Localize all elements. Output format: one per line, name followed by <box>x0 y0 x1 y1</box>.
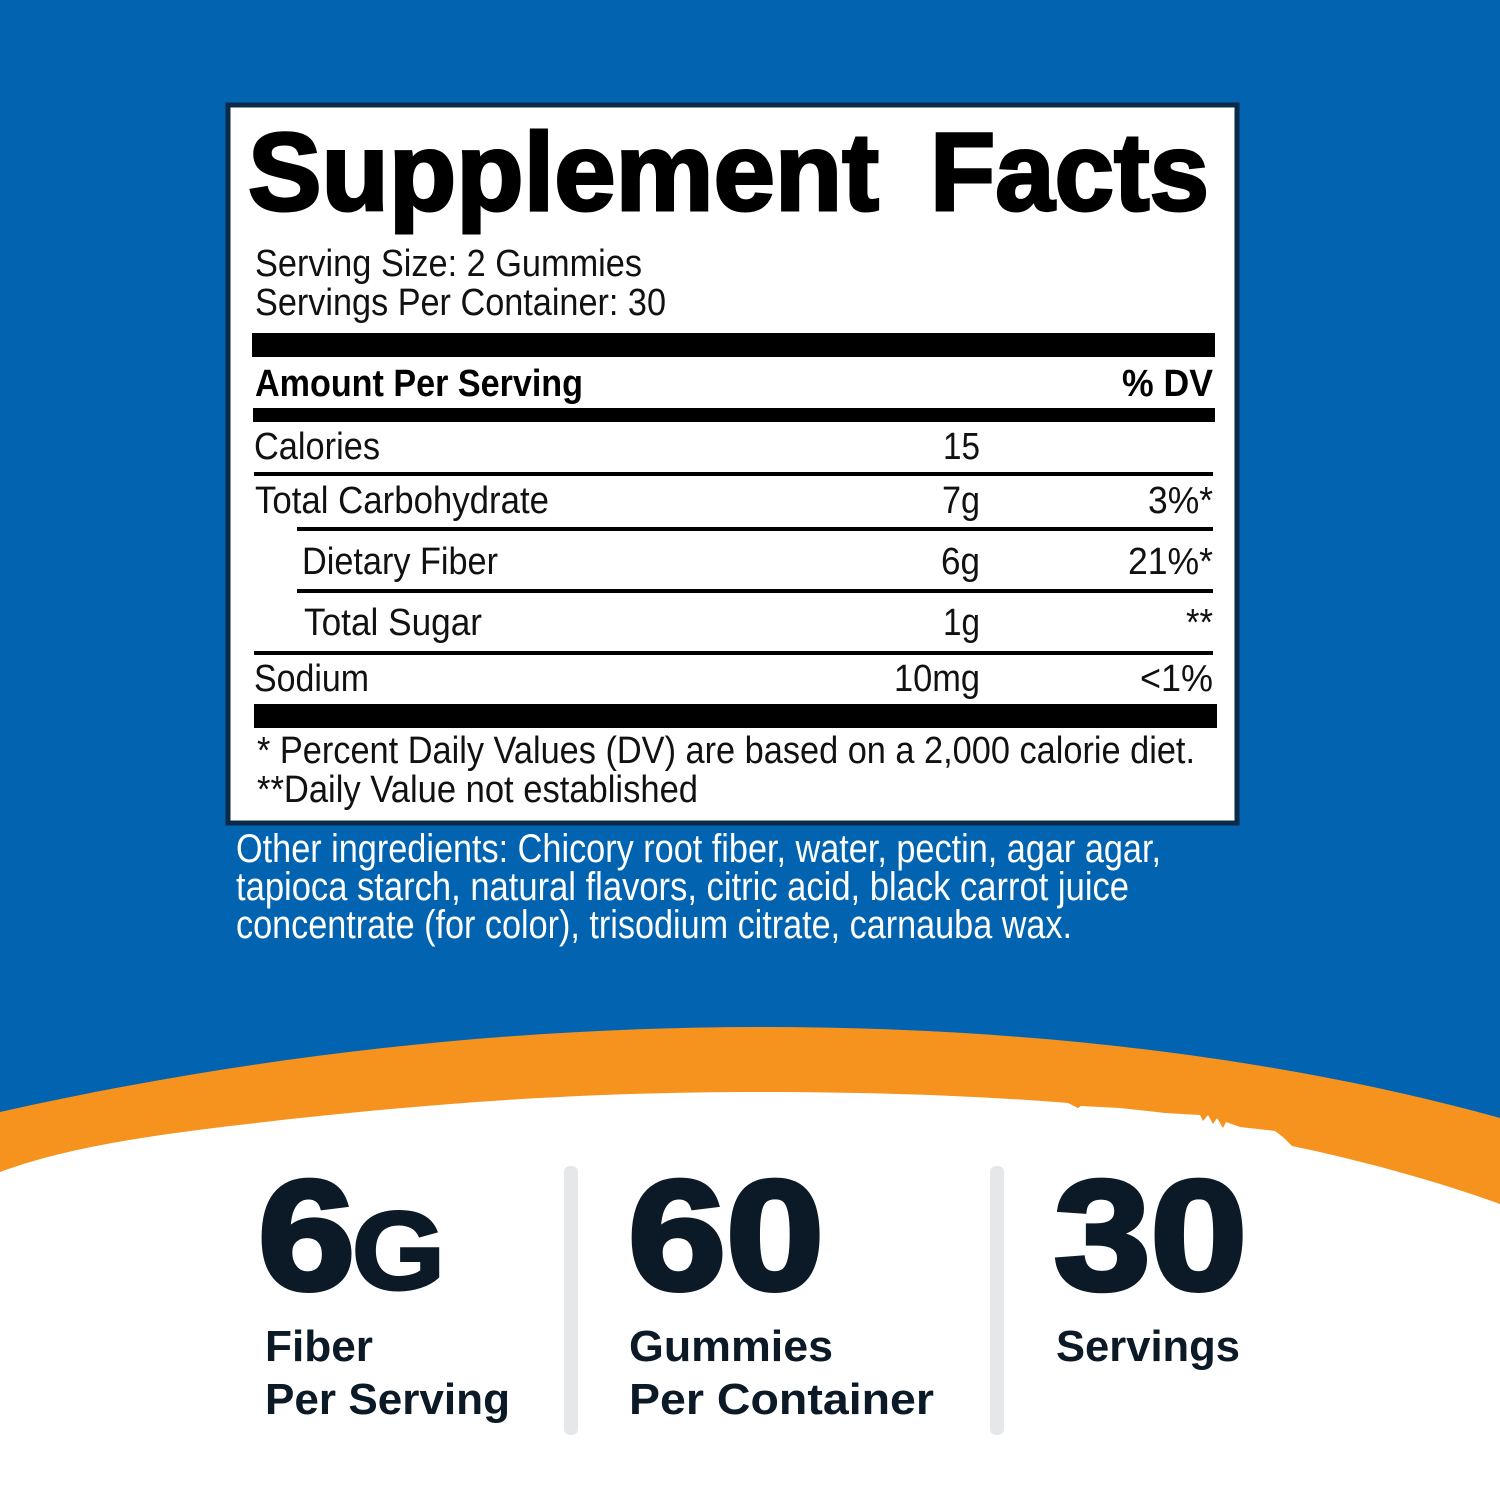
stat: gummies: Per Container <box>629 1375 934 1424</box>
nutrient rows: 7g <box>942 480 980 522</box>
nutrient rows: ** <box>1186 602 1213 644</box>
nutrient rows: Sodium <box>254 658 369 700</box>
nutrient rows: 3%* <box>1148 480 1213 522</box>
other ingredients: concentrate (for color), trisodium citrate, carnauba wax. <box>236 903 1072 947</box>
title: Facts <box>930 111 1209 234</box>
other ingredients: Other ingredients: Chicory root fiber, water, pectin, agar agar, <box>236 827 1161 871</box>
stat: fiber: G <box>352 1190 445 1313</box>
nutrient rows: 15 <box>943 426 980 468</box>
orange brush swoosh <box>0 1027 1500 1204</box>
white lower panel <box>0 1092 1500 1500</box>
thick rule bottom <box>254 704 1217 728</box>
nutrient rows: 21%* <box>1128 541 1213 583</box>
other ingredients <box>236 827 1161 947</box>
nutrient rows: Total Sugar <box>304 602 482 644</box>
table header: Amount Per Serving <box>255 363 583 405</box>
stat: gummies <box>628 1149 934 1424</box>
stat: fiber: 6 <box>258 1149 355 1323</box>
divider <box>564 1166 578 1435</box>
stat: fiber: Per Serving <box>265 1375 510 1424</box>
panel: supplement facts <box>228 105 1237 823</box>
title <box>248 111 1209 234</box>
stat: servings: Servings <box>1056 1322 1240 1371</box>
nutrient rows: Calories <box>254 426 380 468</box>
stat: gummies: 60 <box>628 1149 824 1323</box>
divider <box>990 1166 1004 1435</box>
table header <box>255 363 1214 405</box>
title: Supplement <box>248 111 879 234</box>
nutrient rows: Dietary Fiber <box>302 541 498 583</box>
footnotes: * Percent Daily Values (DV) are based on a 2,000 calorie diet. <box>257 730 1195 772</box>
stat: gummies: Gummies <box>629 1322 833 1371</box>
thick rule top <box>252 333 1215 357</box>
nutrient rows: 1g <box>943 602 980 644</box>
nutrient rows: 6g <box>941 541 980 583</box>
footnotes: **Daily Value not established <box>257 769 698 811</box>
nutrient rows: <1% <box>1140 658 1213 700</box>
thick rule header <box>253 408 1215 422</box>
footnotes <box>257 730 1195 811</box>
stat: servings: 30 <box>1054 1149 1247 1323</box>
nutrient rows <box>254 426 1213 700</box>
serving info <box>255 243 666 324</box>
nutrient rows: 10mg <box>894 658 980 700</box>
other ingredients: tapioca starch, natural flavors, citric acid, black carrot juice <box>236 865 1129 909</box>
nutrient rows: Total Carbohydrate <box>255 480 549 522</box>
table header: % DV <box>1122 363 1214 405</box>
stat: fiber: Fiber <box>265 1322 373 1371</box>
serving info: Serving Size: 2 Gummies <box>255 243 642 285</box>
serving info: Servings Per Container: 30 <box>255 282 666 324</box>
stat: fiber <box>258 1149 510 1424</box>
